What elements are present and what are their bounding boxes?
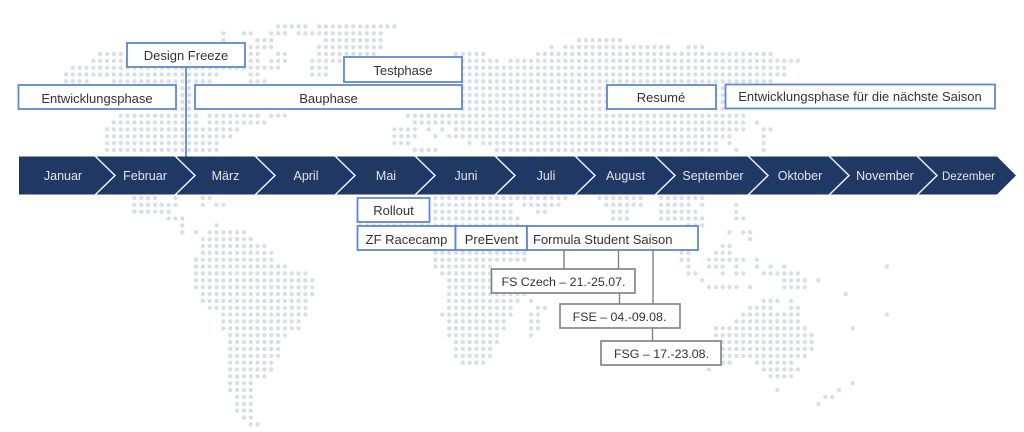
connectors: Formula Student events xyxy=(564,250,653,341)
dotted world map background xyxy=(66,26,887,424)
box: Resumé: Resumé xyxy=(637,90,685,105)
box: PreEvent: PreEvent xyxy=(465,232,519,247)
month labels: Februar xyxy=(123,169,167,183)
box: Design Freeze: Design Freeze xyxy=(144,48,228,63)
month labels: April xyxy=(293,169,319,183)
month labels: Januar xyxy=(44,169,82,183)
month labels: Oktober xyxy=(778,169,822,183)
month labels xyxy=(44,169,995,183)
box: Formula Student Saison xyxy=(527,226,698,250)
box: FSG: FSG – 17.-23.08. xyxy=(614,347,709,361)
box: Rollout xyxy=(358,198,430,222)
box: Entwicklungsphase xyxy=(18,85,176,109)
box: FS Czech: FS Czech – 21.-25.07. xyxy=(502,275,625,289)
month labels: Juni xyxy=(455,169,477,183)
box: Bauphase xyxy=(195,85,462,109)
box: FSE: FSE – 04.-09.08. xyxy=(573,310,666,324)
box: Bauphase: Bauphase xyxy=(299,91,358,106)
box: Formula Student Saison: Formula Student Saison xyxy=(533,232,672,247)
month labels: Mai xyxy=(376,169,396,183)
month labels: November xyxy=(856,169,914,183)
box: Entwicklungsphase für die nächste Saison xyxy=(726,84,995,108)
box: FS Czech xyxy=(492,269,635,293)
box: FSE xyxy=(560,304,680,328)
box: PreEvent xyxy=(456,226,527,250)
box: Resumé xyxy=(607,85,716,109)
box: Entwicklungsphase für die nächste Saison: Entwicklungsphase für die nächste Saison xyxy=(738,89,982,104)
month labels: Juli xyxy=(537,169,555,183)
box: FSG xyxy=(601,341,721,365)
month labels: Dezember xyxy=(942,171,995,183)
box: ZF Racecamp xyxy=(358,226,456,250)
month labels: März xyxy=(212,169,239,183)
connector: Design Freeze to timeline xyxy=(185,67,187,157)
timeline arrow bar xyxy=(19,156,1016,195)
box: Design Freeze xyxy=(127,43,245,67)
month labels: August xyxy=(606,169,645,183)
box: Rollout: Rollout xyxy=(373,203,414,218)
box: Testphase: Testphase xyxy=(373,63,433,78)
month labels: September xyxy=(682,169,744,183)
box: Entwicklungsphase: Entwicklungsphase xyxy=(41,91,153,106)
box: Testphase xyxy=(344,57,462,82)
box: ZF Racecamp: ZF Racecamp xyxy=(366,232,447,247)
